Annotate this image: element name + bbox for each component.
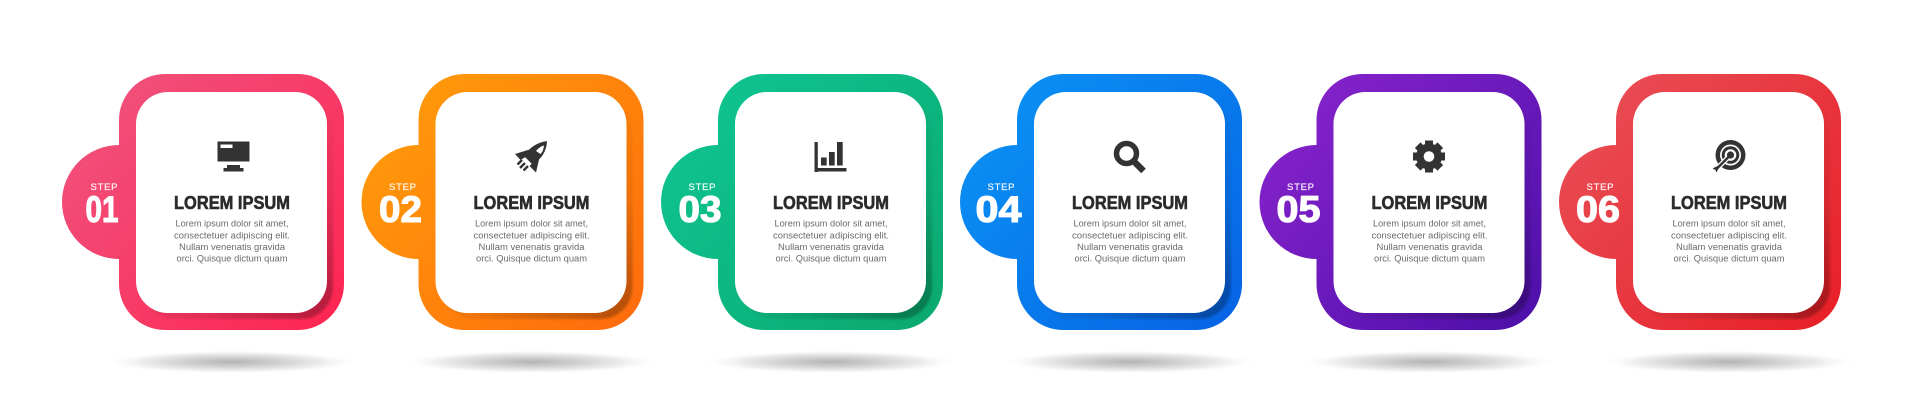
number tab circle 3 — [661, 145, 775, 259]
frame inner shade 6 — [1639, 98, 1830, 319]
step label 4: STEP — [988, 182, 1014, 193]
body text 5: consectetuer adipiscing elit. — [1372, 230, 1488, 242]
number tab circle 6 — [1559, 145, 1673, 259]
body text 2 — [474, 218, 590, 264]
step 4 — [960, 74, 1260, 374]
body text 5: Nullam venenatis gravida — [1376, 242, 1483, 253]
step 3 — [661, 74, 961, 374]
frame 4 — [1017, 74, 1242, 330]
body text 6: orci. Quisque dictum quam — [1674, 254, 1785, 264]
step 2 — [362, 74, 662, 374]
heading 5: LOREM IPSUM — [1372, 193, 1488, 213]
frame 2 — [418, 74, 644, 330]
body text 5: Lorem ipsum dolor sit amet, — [1373, 218, 1486, 230]
heading 1: LOREM IPSUM — [174, 193, 290, 213]
heading 3: LOREM IPSUM — [773, 193, 889, 213]
body text 6 — [1671, 218, 1787, 264]
step label 1: STEP — [90, 182, 118, 193]
body text 3: consectetuer adipiscing elit. — [773, 230, 889, 242]
body text 1: Nullam venenatis gravida — [179, 242, 286, 253]
heading 2: LOREM IPSUM — [474, 193, 590, 213]
body text 1 — [174, 218, 290, 264]
step label 6: STEP — [1586, 182, 1614, 193]
body text 2: Nullam venenatis gravida — [478, 242, 585, 253]
heading 6: LOREM IPSUM — [1671, 193, 1787, 213]
step label 5: STEP — [1287, 182, 1314, 193]
icon: magnifier — [1116, 144, 1144, 171]
frame 6 — [1616, 74, 1841, 330]
ground shadow 4 — [1000, 350, 1260, 374]
body text 3 — [773, 218, 889, 264]
body text 1: consectetuer adipiscing elit. — [174, 230, 290, 242]
step label 2: STEP — [389, 182, 416, 193]
frame inner shade 2 — [442, 98, 632, 319]
white card 1 — [136, 92, 327, 313]
icon: target with arrow — [1712, 140, 1746, 172]
number tab circle 4 — [960, 145, 1074, 259]
icon: gear — [1413, 140, 1445, 172]
body text 4: Nullam venenatis gravida — [1077, 242, 1184, 253]
ground shadow 3 — [701, 350, 961, 374]
heading 4: LOREM IPSUM — [1072, 193, 1188, 213]
body text 2: consectetuer adipiscing elit. — [474, 230, 590, 242]
white card 2 — [436, 92, 626, 313]
step number 3: 03 — [678, 189, 722, 230]
white card 6 — [1633, 92, 1824, 313]
frame 3 — [718, 74, 943, 330]
body text 3: orci. Quisque dictum quam — [776, 254, 887, 264]
step 6 — [1559, 74, 1859, 374]
body text 2: Lorem ipsum dolor sit amet, — [475, 218, 588, 230]
frame 5 — [1316, 74, 1542, 330]
icon: bar chart — [814, 142, 846, 172]
body text 5 — [1372, 218, 1488, 264]
body text 2: orci. Quisque dictum quam — [476, 254, 587, 264]
ground shadow 2 — [402, 350, 662, 374]
white card 3 — [735, 92, 926, 313]
frame inner shade 4 — [1040, 98, 1231, 319]
ground shadow 1 — [102, 350, 362, 374]
white card 5 — [1334, 92, 1524, 313]
step number 4: 04 — [976, 189, 1022, 230]
number tab circle 2 — [362, 145, 476, 259]
ground shadow 6 — [1599, 350, 1859, 374]
number tab circle 5 — [1260, 145, 1374, 259]
body text 6: Lorem ipsum dolor sit amet, — [1672, 218, 1786, 230]
body text 4: orci. Quisque dictum quam — [1074, 254, 1186, 264]
body text 1: Lorem ipsum dolor sit amet, — [176, 218, 288, 230]
body text 4 — [1072, 218, 1188, 264]
body text 5: orci. Quisque dictum quam — [1374, 254, 1485, 264]
step 1 — [62, 74, 362, 374]
ground shadow 5 — [1300, 350, 1560, 374]
frame inner shade 1 — [142, 98, 333, 319]
step number 1: 01 — [86, 189, 118, 230]
body text 3: Nullam venenatis gravida — [778, 242, 885, 253]
icon: rocket — [515, 141, 547, 172]
frame inner shade 3 — [741, 98, 932, 319]
body text 4: consectetuer adipiscing elit. — [1072, 230, 1188, 242]
body text 3: Lorem ipsum dolor sit amet, — [774, 218, 888, 230]
step number 6: 06 — [1576, 189, 1620, 230]
number tab circle 1 — [62, 145, 176, 259]
step label 3: STEP — [688, 182, 716, 193]
step 5 — [1260, 74, 1560, 374]
body text 4: Lorem ipsum dolor sit amet, — [1074, 218, 1186, 230]
step number 2: 02 — [379, 189, 422, 230]
frame inner shade 5 — [1340, 98, 1530, 319]
frame 1 — [119, 74, 344, 330]
body text 1: orci. Quisque dictum quam — [176, 254, 288, 264]
step number 5: 05 — [1276, 189, 1320, 230]
white card 4 — [1034, 92, 1225, 313]
body text 6: consectetuer adipiscing elit. — [1671, 230, 1787, 242]
icon: monitor — [218, 142, 250, 172]
body text 6: Nullam venenatis gravida — [1676, 242, 1783, 253]
